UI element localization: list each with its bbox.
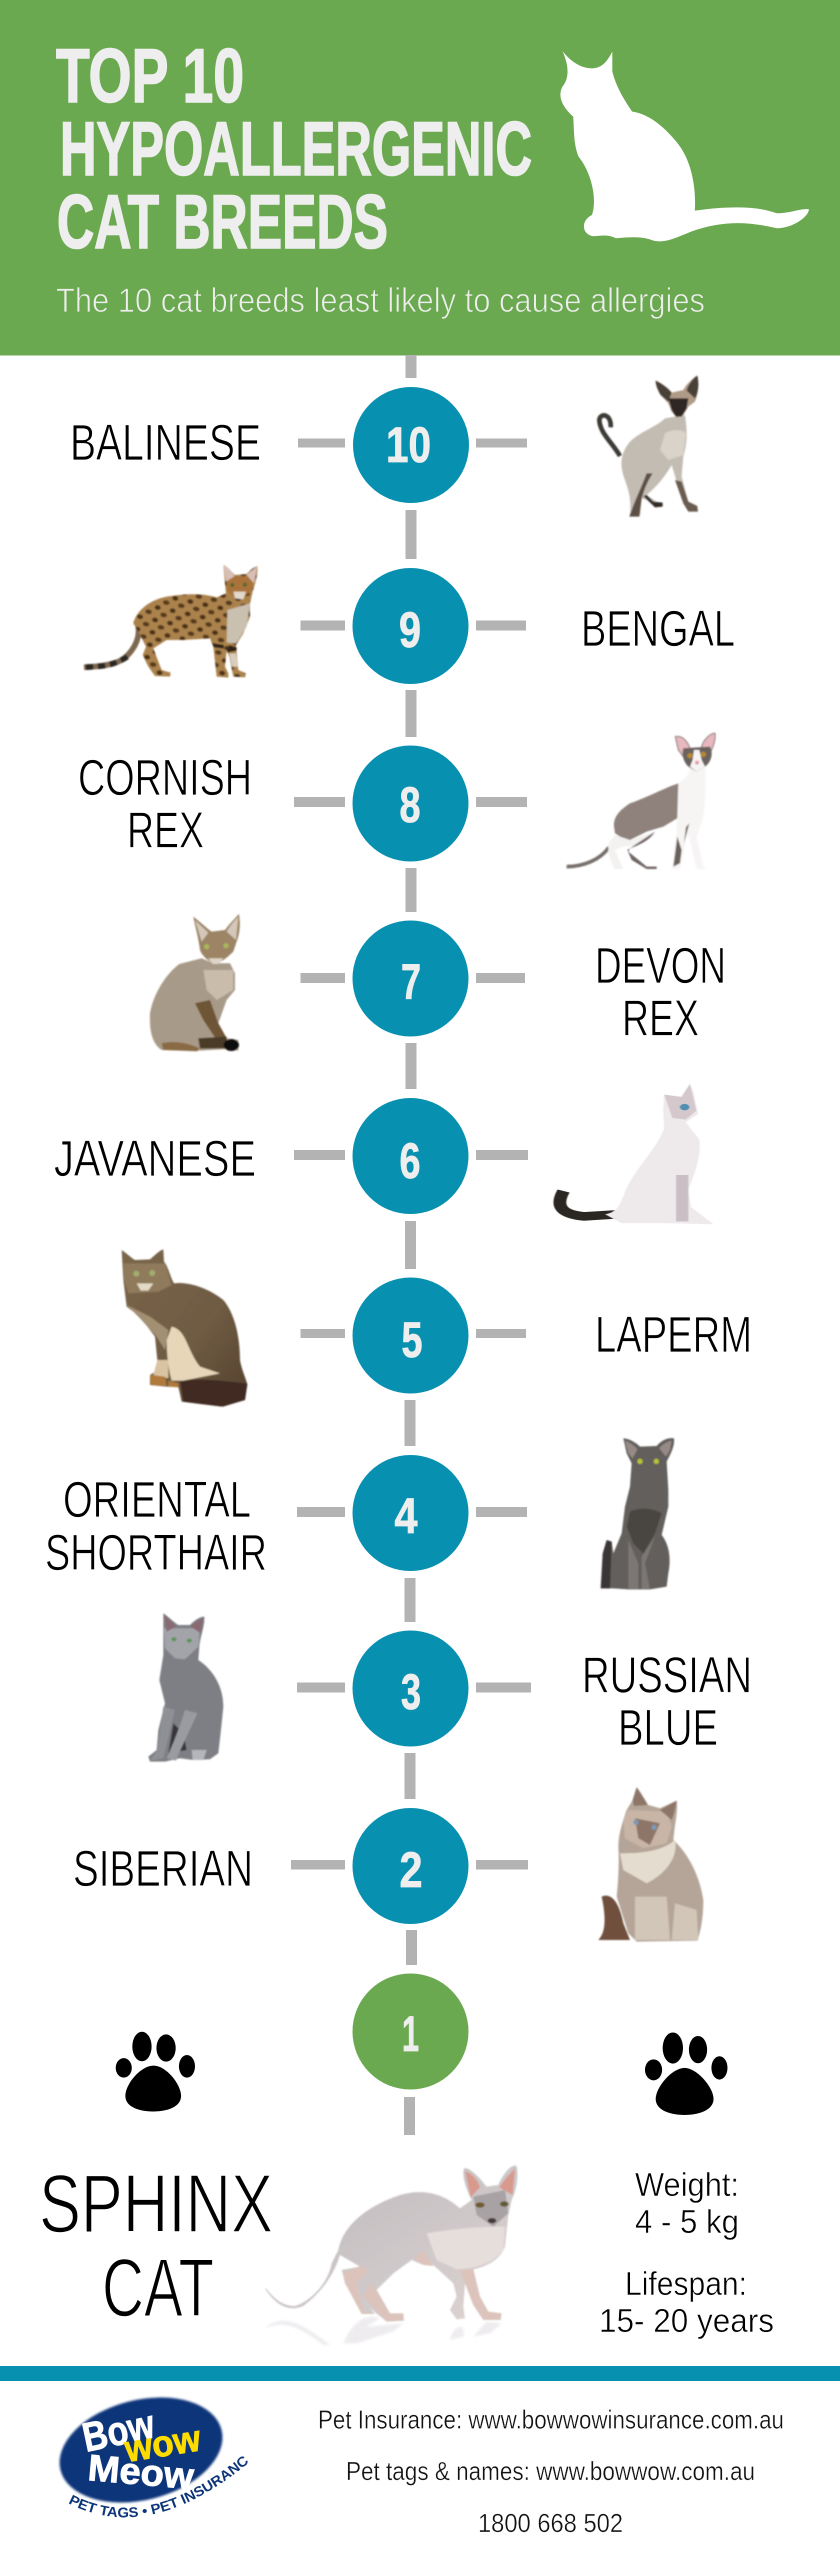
rank 4 circle — [352, 1455, 468, 1571]
label: Sphinx Cat — [39, 2157, 273, 2334]
weight and lifespan facts — [599, 2166, 774, 2339]
icon: white cat silhouette — [560, 51, 809, 241]
rank 1 circle: 1 — [402, 2006, 419, 2062]
icon: right paw print — [645, 2032, 727, 2115]
rank 2 circle — [352, 1808, 468, 1924]
rank 7 circle — [352, 920, 468, 1036]
timeline spine segments — [404, 355, 417, 2135]
cat: LaPerm — [122, 1249, 247, 1407]
logo: Bow Wow Meow: wow — [121, 2417, 204, 2470]
cat: Russian Blue — [148, 1613, 223, 1762]
label: Cornish Rex: CORNISH — [78, 749, 252, 806]
rank 3 circle: 3 — [401, 1664, 421, 1720]
cat: Cornish Rex — [567, 733, 715, 869]
rank 6 circle: 6 — [400, 1133, 420, 1189]
rank 9 circle — [352, 568, 468, 684]
title: CAT BREEDS — [57, 180, 388, 265]
rank 10 circle: 10 — [386, 417, 431, 473]
label: Russian Blue — [582, 1646, 752, 1756]
label: Sphinx Cat: CAT — [102, 2241, 214, 2334]
label: Devon Rex — [595, 937, 726, 1046]
label: Devon Rex: REX — [622, 990, 699, 1046]
rank 3 circle — [352, 1630, 468, 1746]
footer contact lines: 1800 668 502 — [478, 2508, 623, 2538]
weight and lifespan facts: Weight: — [635, 2166, 739, 2203]
rank 7 circle: 7 — [401, 954, 421, 1010]
rank 9 circle: 9 — [399, 602, 421, 658]
title: TOP 10 — [56, 34, 244, 119]
label: Russian Blue: RUSSIAN — [582, 1646, 752, 1704]
label: Oriental Shorthair: SHORTHAIR — [45, 1524, 267, 1581]
label: Balinese: BALINESE — [70, 414, 261, 471]
logo: Bow Wow Meow: Bow — [78, 2401, 158, 2461]
rank 10 circle — [353, 387, 469, 503]
rank 2 circle: 2 — [400, 1842, 422, 1898]
label: Russian Blue: BLUE — [618, 1699, 718, 1756]
teal footer band — [0, 2366, 840, 2381]
rank 6 circle — [352, 1098, 468, 1214]
timeline connector bars — [291, 438, 531, 1870]
cat: Oriental Shorthair — [601, 1438, 674, 1589]
footer contact lines — [318, 2404, 784, 2538]
label: Cornish Rex: REX — [127, 802, 204, 858]
logo: Bow Wow Meow — [58, 2396, 248, 2518]
label: Oriental Shorthair: ORIENTAL — [63, 1471, 251, 1528]
label: Sphinx Cat: SPHINX — [39, 2157, 273, 2250]
rank 5 circle — [352, 1278, 468, 1394]
weight and lifespan facts: 4 - 5 kg — [635, 2203, 739, 2240]
subtitle: The 10 cat breeds least likely to cause allergies — [56, 282, 705, 320]
weight and lifespan facts: Lifespan: — [625, 2265, 747, 2302]
rank 1 circle — [352, 1974, 468, 2090]
cat: Balinese — [599, 376, 698, 517]
logo: Bow Wow Meow: PET TAGS • PET INSURANCE — [68, 2456, 248, 2518]
label: Javanese: JAVANESE — [54, 1130, 256, 1187]
rank 8 circle: 8 — [400, 777, 420, 833]
footer contact lines: Pet tags & names: www.bowwow.com.au — [346, 2456, 755, 2486]
icon: left paw print — [116, 2032, 195, 2111]
title: HYPOALLERGENIC — [60, 107, 532, 192]
title — [56, 34, 532, 265]
cat: Devon Rex — [150, 914, 240, 1051]
label: Siberian: SIBERIAN — [73, 1840, 253, 1897]
weight and lifespan facts: 15- 20 years — [599, 2302, 774, 2339]
label: LaPerm: LAPERM — [595, 1306, 752, 1363]
label: Cornish Rex — [78, 749, 252, 858]
label: Oriental Shorthair — [45, 1471, 267, 1581]
rank 4 circle: 4 — [394, 1488, 418, 1544]
cat: Bengal — [84, 565, 257, 678]
cat: Sphinx — [265, 2166, 517, 2345]
cat: Siberian — [598, 1787, 703, 1942]
label: Bengal: BENGAL — [581, 600, 735, 657]
label: Devon Rex: DEVON — [595, 937, 726, 994]
logo: Bow Wow Meow: Meow — [86, 2447, 196, 2497]
cat: Javanese — [560, 1084, 714, 1224]
rank 5 circle: 5 — [402, 1312, 422, 1368]
header panel — [0, 0, 840, 356]
rank 8 circle — [352, 746, 468, 862]
